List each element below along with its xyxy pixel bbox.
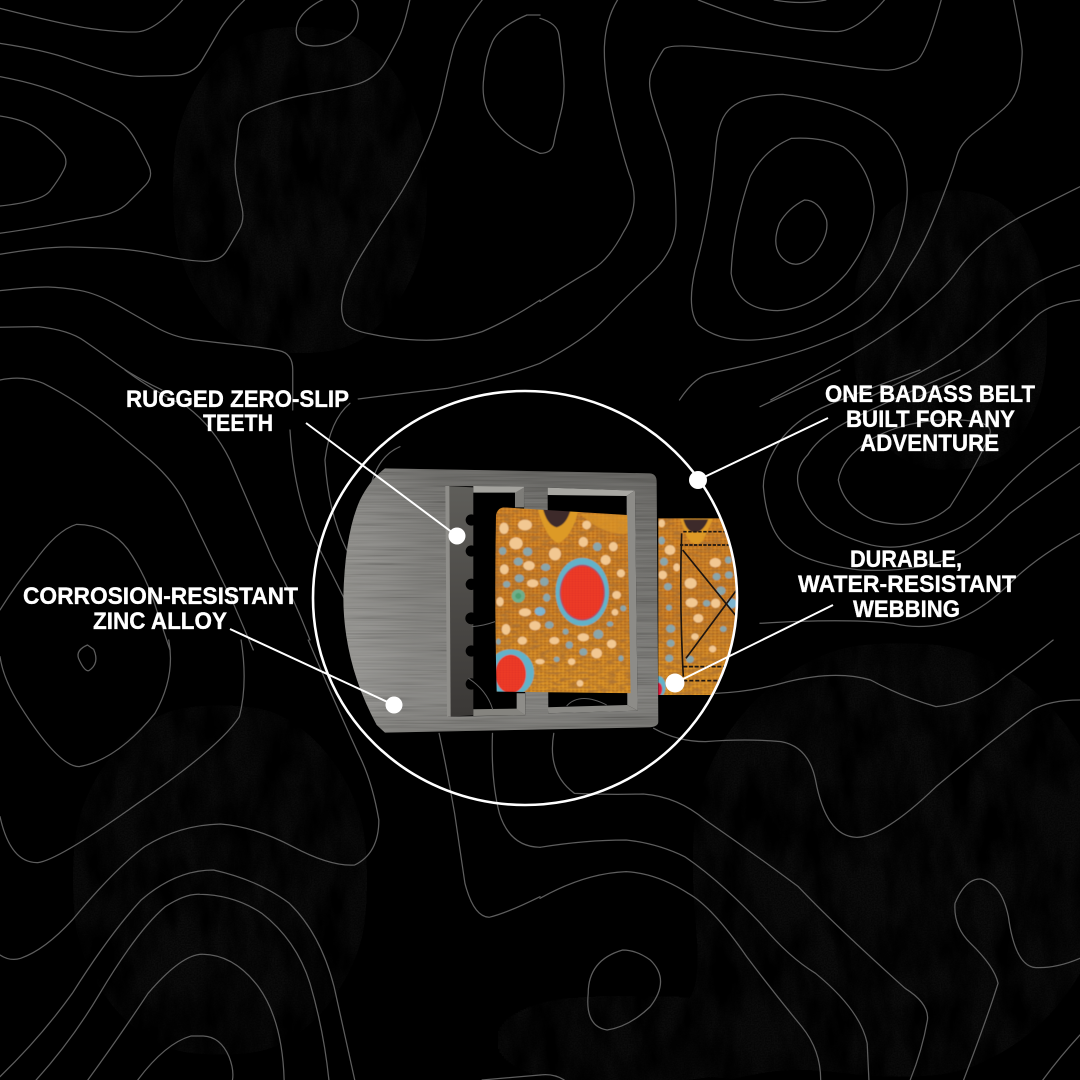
webbing: rear strap clipped by the circle [658, 518, 736, 695]
right slot [548, 488, 638, 713]
stitching [680, 532, 737, 681]
left slot with teeth [445, 486, 525, 717]
small red spot [496, 648, 535, 692]
webbing: front fold [495, 507, 630, 694]
callout: rugged zero-slip teeth [306, 423, 466, 544]
label: one badass belt: ONE BADASS BELT [825, 381, 1035, 408]
circle frame [313, 391, 737, 805]
label: one badass belt: ADVENTURE [860, 430, 999, 457]
label: corrosion-resistant zinc alloy [23, 583, 298, 635]
label: corrosion-resistant zinc alloy: ZINC ALLOY [93, 608, 227, 635]
label: durable water-resistant webbing [798, 546, 1016, 623]
label: rugged zero-slip teeth: RUGGED ZERO-SLIP [126, 386, 349, 413]
callout: one badass belt [689, 418, 828, 489]
label: corrosion-resistant zinc alloy: CORROSION-RESISTANT [23, 583, 298, 610]
label: one badass belt: BUILT FOR ANY [846, 406, 1015, 433]
label: rugged zero-slip teeth [126, 386, 349, 437]
large red spot [556, 558, 609, 626]
callout: zinc alloy [230, 629, 402, 714]
label: durable water-resistant webbing: WATER-RESISTANT [798, 571, 1016, 598]
belt buckle with webbing [340, 467, 760, 737]
label: rugged zero-slip teeth: TEETH [203, 410, 273, 437]
label: durable water-resistant webbing: WEBBING [853, 596, 960, 623]
callout: webbing [666, 605, 833, 692]
buckle metal body [340, 467, 660, 737]
label: one badass belt [825, 381, 1035, 457]
label: durable water-resistant webbing: DURABLE, [850, 546, 962, 573]
